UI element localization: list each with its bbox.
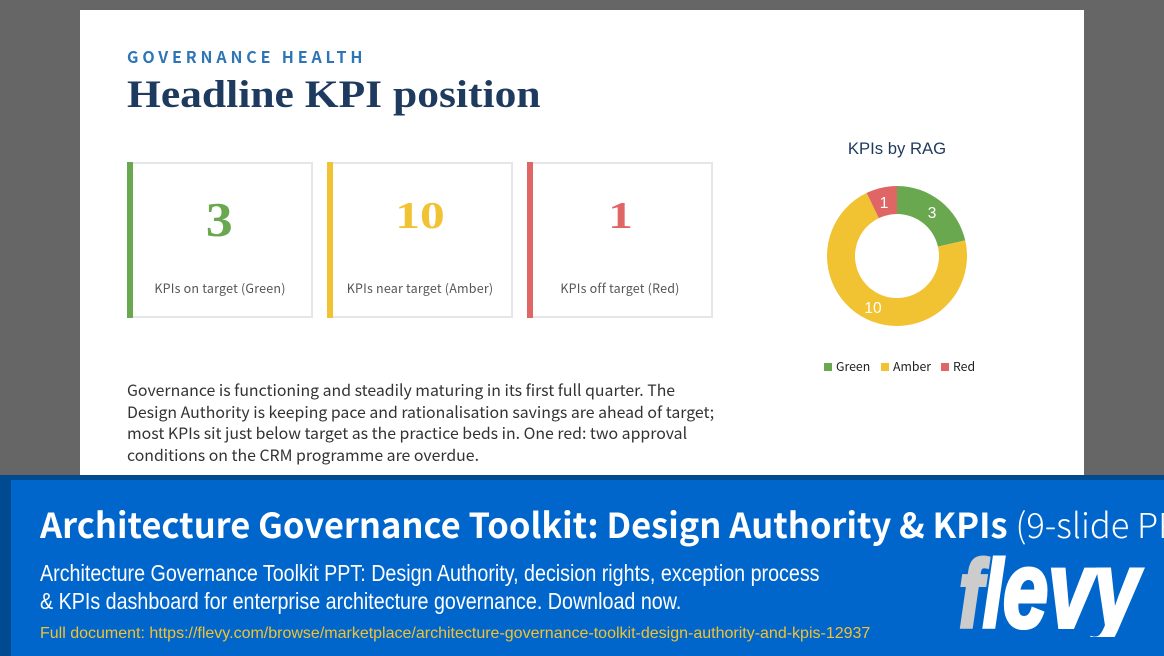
legend bbox=[824, 357, 975, 375]
summary text bbox=[127, 378, 714, 466]
KPI card: red: KPIs off target (Red) bbox=[560, 278, 680, 297]
eyebrow heading: GOVERNANCE HEALTH bbox=[127, 44, 366, 68]
slide panel bbox=[80, 10, 1084, 480]
legend: Green bbox=[836, 357, 870, 375]
KPI card: red bbox=[527, 162, 713, 318]
data labels: 1 bbox=[880, 195, 888, 212]
promo banner bbox=[0, 475, 1164, 656]
chart title: KPIs by RAG bbox=[848, 139, 946, 158]
KPI card: green: 3 bbox=[206, 192, 233, 247]
summary text: conditions on the CRM programme are overdue. bbox=[127, 443, 479, 466]
summary text: most KPIs sit just below target as the practice beds in. One red: two approval bbox=[127, 421, 687, 444]
banner inner panel bbox=[11, 480, 1164, 656]
summary text: Governance is functioning and steadily maturing in its first full quarter. The bbox=[127, 378, 675, 401]
legend: Amber bbox=[893, 357, 931, 375]
KPI card: amber: 10 bbox=[395, 195, 444, 237]
data labels: 3 bbox=[928, 205, 936, 222]
banner description: Architecture Governance Toolkit PPT: Design Authority, decision rights, exception process bbox=[40, 560, 820, 586]
donut segments bbox=[827, 186, 967, 326]
banner description bbox=[40, 560, 820, 614]
data labels bbox=[864, 195, 936, 317]
banner description: & KPIs dashboard for enterprise architecture governance. Download now. bbox=[40, 588, 681, 614]
title: Headline KPI position bbox=[127, 73, 541, 116]
KPI card: red: 1 bbox=[608, 195, 632, 237]
KPI card: amber bbox=[327, 162, 513, 318]
KPI card: green bbox=[127, 162, 313, 318]
KPI card: green: KPIs on target (Green) bbox=[154, 278, 286, 297]
banner link: Full document: https://flevy.com/browse/marketplace/architecture-governance-toolkit-design-authority-and-kpis-12937 bbox=[40, 625, 870, 642]
legend: Red bbox=[953, 357, 975, 375]
KPI card: amber: KPIs near target (Amber) bbox=[347, 278, 493, 297]
summary text: Design Authority is keeping pace and rationalisation savings are ahead of target; bbox=[127, 400, 714, 423]
data labels: 10 bbox=[864, 300, 882, 317]
